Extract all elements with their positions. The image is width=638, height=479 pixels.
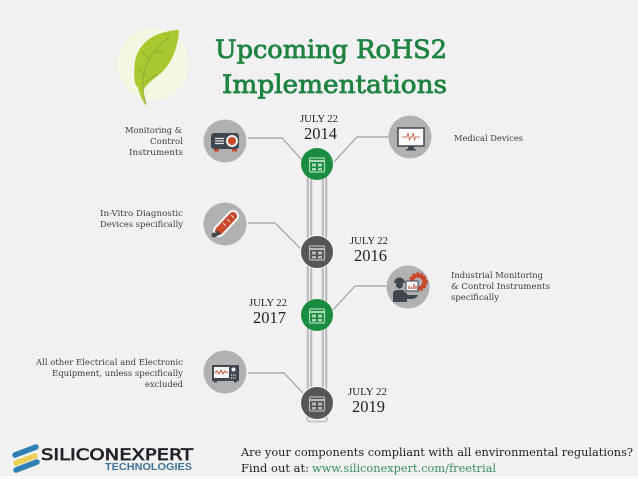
icon: industrial engineer: [386, 266, 430, 308]
label: in-vitro devices: In-Vitro Diagnostic: [100, 209, 183, 219]
label: medical devices: Medical Devices: [454, 134, 523, 144]
label: monitoring and control instruments: Monitoring &: [125, 126, 182, 136]
label: monitoring and control instruments: Instruments: [129, 148, 183, 158]
date: 2019: 2019: [352, 397, 385, 416]
connector: monitoring to 2014: [248, 138, 302, 160]
connector: other equipment to 2019: [248, 373, 303, 393]
title: Upcoming RoHS2: [215, 35, 447, 64]
label: all other equipment: [35, 358, 184, 390]
logo: SiliconExpert Technologies: TECHNOLOGIES: [105, 462, 192, 473]
connector: medical to 2014: [334, 137, 389, 162]
label: monitoring and control instruments: Control: [150, 137, 183, 147]
logo: SiliconExpert Technologies: [15, 445, 193, 473]
date: 2014: JULY 22: [300, 114, 338, 125]
connector: in-vitro to 2016: [248, 223, 301, 249]
node: 2017: [301, 299, 333, 331]
icon: medical monitor: [388, 116, 432, 158]
label: industrial monitoring: [451, 271, 550, 303]
title: Implementations: [222, 70, 447, 99]
logo: SiliconExpert Technologies: SILICONEXPERT: [41, 445, 193, 464]
label: in-vitro devices: Devices specifically: [100, 220, 183, 230]
label: in-vitro devices: [100, 209, 183, 230]
date: 2017: 2017: [253, 308, 286, 327]
connector: industrial to 2017: [333, 286, 386, 310]
icon: thermometer: [204, 202, 246, 246]
call to action: Find out at:: [241, 462, 309, 475]
label: industrial monitoring: specifically: [451, 293, 499, 303]
node: 2019: [300, 386, 334, 420]
icon: oscilloscope: [204, 350, 246, 394]
call to action: www.siliconexpert.com/freetrial: [312, 462, 496, 475]
label: all other equipment: excluded: [145, 380, 184, 390]
label: industrial monitoring: Industrial Monitoring: [451, 271, 544, 281]
title: [215, 35, 447, 99]
label: industrial monitoring: & Control Instruments: [451, 282, 550, 292]
date: 2016: [350, 236, 388, 265]
date: 2017: [249, 298, 287, 327]
call to action: [240, 446, 633, 475]
label: all other equipment: Equipment, unless specifically: [52, 369, 183, 379]
date: 2017: JULY 22: [249, 298, 287, 309]
date: 2014: 2014: [304, 124, 337, 143]
timeline rails: [307, 176, 327, 422]
icon: projector: [204, 120, 246, 162]
node: 2016: [300, 236, 334, 268]
date: 2019: JULY 22: [348, 387, 387, 398]
date: 2016: 2016: [354, 246, 387, 265]
call to action: Are your components compliant with all environmental regulations?: [240, 446, 633, 459]
label: all other equipment: All other Electrical and Electronic: [35, 358, 183, 368]
date: 2019: [348, 387, 387, 416]
label: monitoring and control instruments: [125, 126, 183, 158]
date: 2016: JULY 22: [350, 236, 388, 247]
icon: leaf: [117, 28, 189, 107]
date: 2014: [300, 114, 338, 143]
node: 2014: [301, 148, 333, 180]
